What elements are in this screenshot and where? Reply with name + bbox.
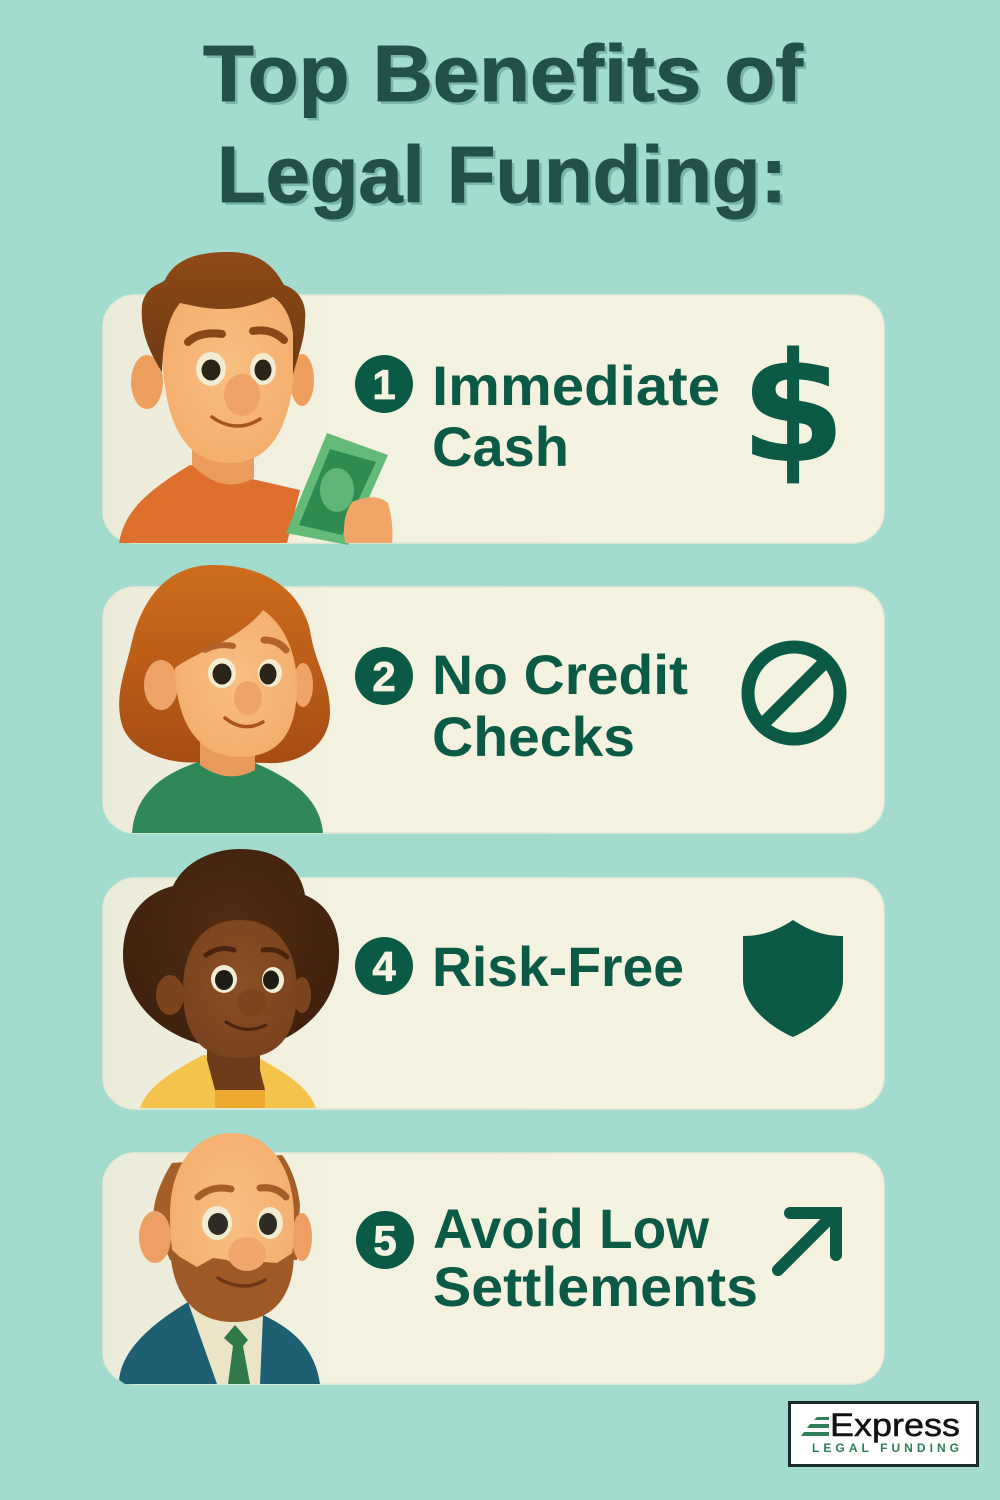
label: immediate cash: Cash xyxy=(432,415,569,478)
label: risk-free: Risk-Free xyxy=(432,935,684,998)
title xyxy=(203,29,806,222)
icon: up-right arrow xyxy=(778,1213,836,1270)
illustration: woman in green sweater xyxy=(119,565,330,833)
logo speed bars xyxy=(801,1417,829,1436)
number badge 4: 4 xyxy=(372,943,396,990)
number badge 2 xyxy=(355,647,413,705)
number badge 2: 2 xyxy=(372,653,396,700)
number badge 1: 1 xyxy=(372,361,396,408)
title: Top Benefits of xyxy=(206,32,806,121)
illustration: bald bearded man in suit xyxy=(119,1133,320,1384)
number badge 1 xyxy=(355,355,413,413)
label: immediate cash: Immediate xyxy=(432,354,720,417)
panel: no credit checks xyxy=(103,565,884,833)
label: avoid low settlements: Settlements xyxy=(433,1255,758,1318)
label: no credit checks: Checks xyxy=(432,705,635,768)
illustration: woman with afro xyxy=(123,849,339,1108)
number badge 4 xyxy=(355,937,413,995)
number badge 5 xyxy=(356,1211,414,1269)
illustration: man holding cash xyxy=(119,252,392,545)
title: Top Benefits of xyxy=(203,29,803,118)
icon: prohibited sign xyxy=(748,647,840,739)
label: immediate cash xyxy=(432,354,720,478)
label: avoid low settlements: Avoid Low xyxy=(433,1197,709,1260)
panel: immediate cash xyxy=(103,252,884,545)
icon: dollar sign: $ xyxy=(740,320,846,497)
label: avoid low settlements xyxy=(433,1197,758,1318)
panel: avoid low settlements xyxy=(103,1133,884,1384)
title: Legal Funding: xyxy=(220,133,790,222)
number badge 5: 5 xyxy=(373,1217,397,1264)
logo tagline: LEGAL FUNDING xyxy=(812,1441,959,1455)
label: no credit checks: No Credit xyxy=(432,643,688,706)
title: Legal Funding: xyxy=(217,130,787,219)
panel: risk-free xyxy=(103,849,884,1109)
label: no credit checks xyxy=(432,643,688,768)
logo: express legal funding xyxy=(790,1402,978,1466)
logo wordmark: Express xyxy=(830,1407,960,1443)
icon: shield xyxy=(743,920,843,1037)
